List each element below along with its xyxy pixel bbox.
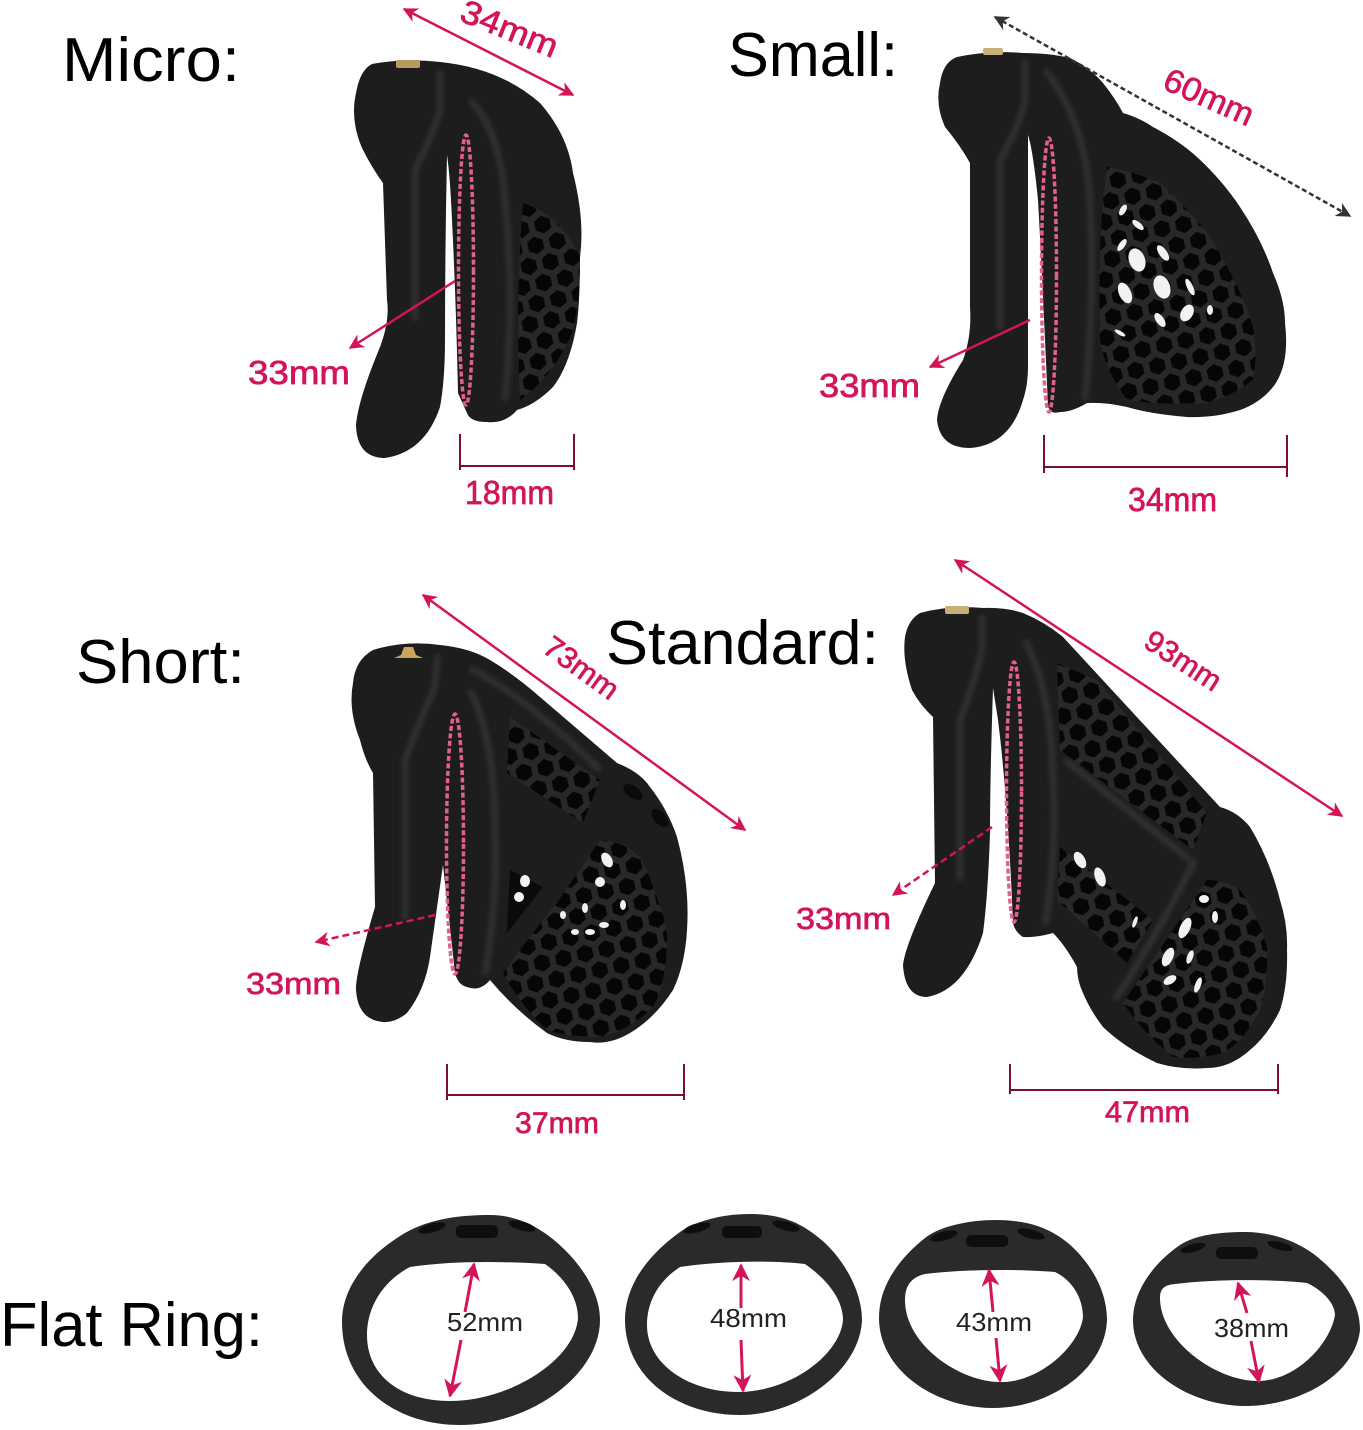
Short white openings (514, 851, 626, 935)
ring 48mm arrows (741, 1265, 743, 1391)
ring 38mm shape (1133, 1232, 1360, 1406)
title: Flat Ring: Flat Ring: (0, 1291, 263, 1360)
ring 48mm slots (682, 1218, 801, 1238)
panel: Flat ring 48mm (625, 1214, 862, 1415)
Standard width label: 47mm (1105, 1096, 1190, 1129)
Standard side label: 33mm (796, 901, 891, 936)
Standard depth arrow (893, 827, 992, 895)
Micro dashed ellipse (458, 135, 474, 405)
Micro cage mesh (518, 203, 580, 400)
Micro width label: 18mm (465, 474, 554, 511)
Standard lock pin (945, 606, 969, 614)
Small width bracket (1044, 435, 1287, 477)
Small side label: 33mm (819, 367, 920, 404)
ring 43mm shape (879, 1220, 1107, 1408)
Micro width bracket (460, 434, 574, 470)
Small highlights (1000, 60, 1092, 400)
Short lock pin (394, 647, 423, 658)
Small dashed ellipse (1042, 138, 1056, 412)
Micro side label: 33mm (248, 354, 350, 391)
ring 52mm slots (417, 1218, 537, 1238)
Micro highlights (415, 70, 510, 400)
Standard lower right mesh (1123, 880, 1267, 1058)
title: Short: Short: (76, 628, 245, 697)
Small depth arrow (930, 320, 1030, 367)
ring 43mm label: 43mm (956, 1307, 1032, 1337)
ring 52mm arrows (450, 1264, 474, 1396)
Small top label: 60mm (1158, 61, 1260, 133)
Standard top label: 93mm (1138, 624, 1227, 698)
Small cage mesh (1099, 167, 1256, 404)
panel: Standard product (796, 560, 1342, 1129)
Small width label: 34mm (1128, 481, 1217, 518)
panel: Micro product (248, 0, 581, 511)
ring 43mm arrows (989, 1270, 1000, 1381)
Standard width bracket (1010, 1064, 1278, 1094)
Standard lower left mesh (1057, 847, 1153, 963)
title: Micro: Micro: (62, 26, 240, 95)
Standard body silhouette (903, 607, 1287, 1068)
Short side label: 33mm (246, 966, 341, 1001)
ring 38mm arrows (1238, 1283, 1259, 1382)
Standard upper mesh (1057, 663, 1207, 850)
Short highlights (405, 655, 600, 975)
Short lower mesh (503, 840, 667, 1037)
Short body silhouette (352, 643, 688, 1043)
Micro depth arrow (350, 281, 455, 348)
Small lock pin (983, 48, 1003, 55)
Small body silhouette (937, 52, 1286, 448)
Short upper mesh (507, 717, 600, 823)
Short top label: 73mm (537, 630, 625, 707)
ring 38mm slots (1179, 1239, 1294, 1259)
Micro top arrow (404, 9, 573, 95)
Short side window (507, 870, 543, 933)
ring 38mm label: 38mm (1214, 1313, 1289, 1343)
Short width label: 37mm (515, 1107, 599, 1140)
Short upper vents (621, 781, 672, 830)
Micro body silhouette (354, 60, 581, 458)
ring 52mm label: 52mm (447, 1307, 523, 1337)
ring 52mm shape (342, 1215, 600, 1425)
Micro lock pin (396, 60, 420, 68)
Short dashed ellipse (446, 714, 464, 974)
panel: Short product (246, 595, 745, 1140)
ring 48mm label: 48mm (710, 1303, 787, 1333)
panel: Flat ring 52mm (342, 1215, 600, 1425)
Small top arrow (995, 17, 1350, 216)
Standard white openings (1071, 850, 1218, 994)
ring 43mm slots (929, 1226, 1046, 1247)
Small white openings (1114, 203, 1213, 338)
Standard dashed ellipse (1006, 662, 1022, 922)
Short depth arrow (316, 915, 435, 942)
Standard highlights (960, 615, 1195, 1000)
title: Standard: Standard: (606, 609, 879, 678)
panel: Flat ring 43mm (879, 1220, 1107, 1408)
Short top arrow (423, 595, 745, 830)
Standard top arrow (955, 560, 1342, 816)
Short width bracket (447, 1064, 684, 1100)
title: Small: Small: (728, 21, 898, 90)
panel: Flat ring 38mm (1133, 1232, 1360, 1406)
panel: Small product (819, 17, 1350, 518)
ring 48mm shape (625, 1214, 862, 1415)
